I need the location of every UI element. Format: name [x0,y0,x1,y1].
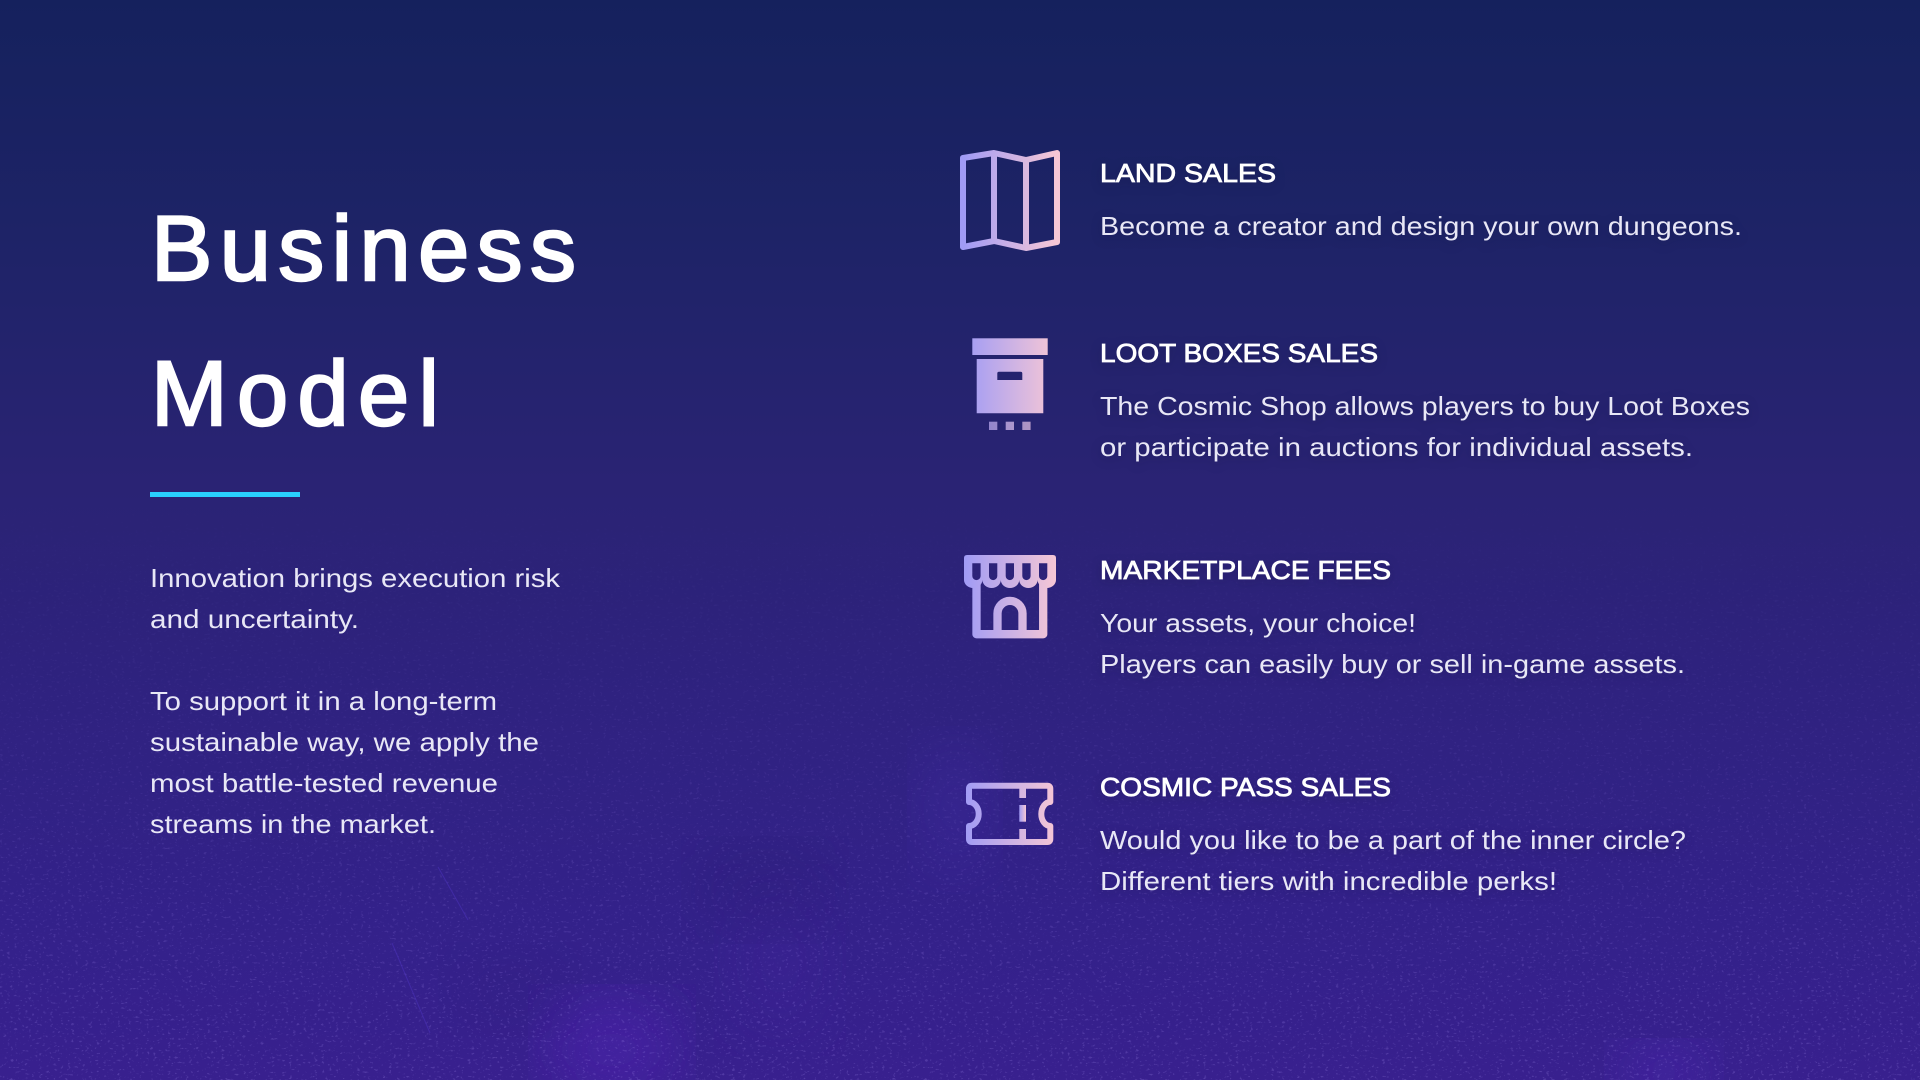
panel: marketplace fees: Players can easily buy or sell in-game assets. [1100,649,1685,679]
icon: loot box [972,338,1048,430]
intro text block [150,563,561,839]
intro text block: streams in the market. [150,809,436,839]
icon: market stall [964,555,1056,634]
panel: cosmic pass sales: COSMIC PASS SALES [1100,772,1391,802]
panel: loot boxes sales [1100,338,1750,462]
panel: cosmic pass sales [1100,772,1686,896]
intro text block: To support it in a long-term [150,686,497,716]
panel: marketplace fees [1100,555,1685,679]
panel: land sales [1100,158,1742,241]
panel: marketplace fees: Your assets, your choice! [1100,608,1416,638]
intro text block: sustainable way, we apply the [150,727,539,757]
title: Business [151,198,576,300]
intro text block: and uncertainty. [150,604,359,634]
panel: loot boxes sales: LOOT BOXES SALES [1100,338,1378,368]
panel: marketplace fees: MARKETPLACE FEES [1100,555,1391,585]
icon: folded map [963,153,1057,248]
panel: cosmic pass sales: Would you like to be a part of the inner circle? [1100,825,1686,855]
panel: cosmic pass sales: Different tiers with incredible perks! [1100,866,1557,896]
panel: loot boxes sales: The Cosmic Shop allows players to buy Loot Boxes [1100,391,1750,421]
panel: land sales: LAND SALES [1100,158,1276,188]
intro text block: most battle-tested revenue [150,768,498,798]
intro text block: Innovation brings execution risk [150,563,561,593]
icon: ticket [969,785,1050,843]
title: Model [151,343,439,445]
title [151,198,576,445]
accent underline [150,492,300,497]
panel: loot boxes sales: or participate in auctions for individual assets. [1100,432,1693,462]
panel: land sales: Become a creator and design your own dungeons. [1100,211,1742,241]
